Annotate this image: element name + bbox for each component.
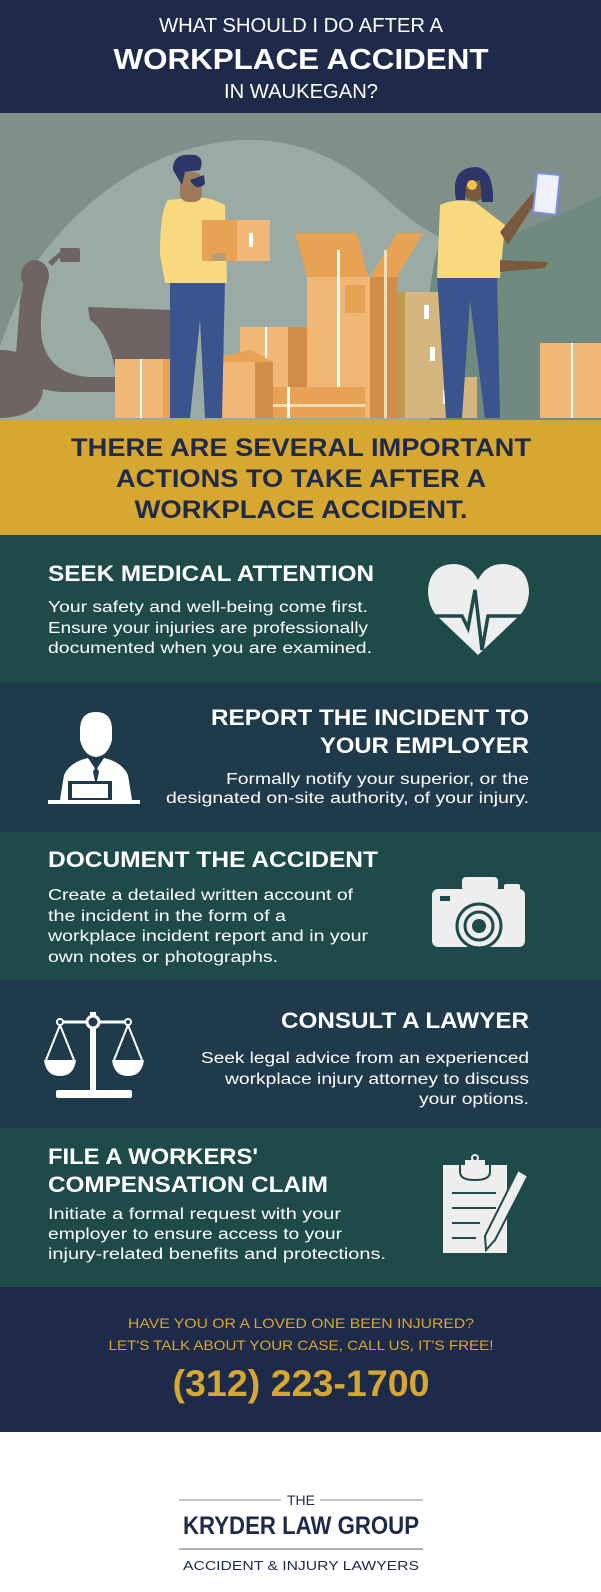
- panel: report the incident: designated on-site authority, of your injury.: [166, 790, 529, 807]
- woman: [437, 167, 560, 418]
- icon: scales of justice: [44, 1012, 144, 1098]
- header: WORKPLACE ACCIDENT: [114, 44, 489, 76]
- banner: intro statement: [0, 420, 601, 535]
- panel: file a workers' compensation claim: FILE A WORKERS': [48, 1144, 258, 1169]
- panel: document the accident: the incident in the form of a: [48, 908, 286, 925]
- panel: file a workers' compensation claim: injury-related benefits and protections.: [48, 1246, 386, 1263]
- banner: intro statement: ACTIONS TO TAKE AFTER A: [116, 465, 486, 493]
- panel: report the incident: YOUR EMPLOYER: [320, 733, 529, 758]
- icon: employee at desk: [48, 712, 140, 804]
- panel: consult a lawyer: CONSULT A LAWYER: [281, 1008, 529, 1033]
- logo: [179, 1492, 423, 1573]
- panel: document the accident: [0, 832, 601, 980]
- icon: heart with pulse: [428, 564, 529, 655]
- boxes: [115, 233, 601, 418]
- panel: consult a lawyer: your options.: [419, 1091, 529, 1108]
- scooter: [0, 248, 180, 418]
- header: [0, 0, 601, 113]
- banner: intro statement: WORKPLACE ACCIDENT.: [134, 496, 468, 524]
- man: [160, 155, 270, 418]
- panel: seek medical attention: SEEK MEDICAL ATTENTION: [48, 561, 374, 586]
- panel: file a workers' compensation claim: Initiate a formal request with your: [48, 1206, 341, 1223]
- panel: document the accident: workplace incident report and in your: [47, 928, 368, 945]
- illustration: warehouse workers: [0, 113, 601, 420]
- icon: clipboard and pen: [443, 1155, 528, 1253]
- panel: seek medical attention: [0, 535, 601, 683]
- call to action: [0, 1287, 601, 1432]
- panel: report the incident: [0, 683, 601, 832]
- logo: THE: [287, 1492, 315, 1508]
- panel: file a workers' compensation claim: employer to ensure access to your: [48, 1226, 342, 1243]
- logo: KRYDER LAW GROUP: [183, 1512, 419, 1540]
- panel: document the accident: DOCUMENT THE ACCIDENT: [48, 847, 379, 872]
- panel: consult a lawyer: [0, 980, 601, 1128]
- panel: seek medical attention: Ensure your injuries are professionally: [48, 620, 368, 637]
- logo: ACCIDENT & INJURY LAWYERS: [183, 1558, 419, 1573]
- call to action: HAVE YOU OR A LOVED ONE BEEN INJURED?: [128, 1315, 474, 1331]
- panel: report the incident: REPORT THE INCIDENT TO: [211, 705, 529, 730]
- panel: document the accident: own notes or photographs.: [48, 949, 278, 966]
- header: IN WAUKEGAN?: [224, 81, 378, 103]
- icon: camera: [432, 877, 525, 948]
- phone number: (312) 223-1700: [172, 1363, 430, 1404]
- panel: consult a lawyer: Seek legal advice from an experienced: [201, 1050, 529, 1067]
- panel: file a workers' compensation claim: COMPENSATION CLAIM: [48, 1172, 328, 1197]
- call to action: LET'S TALK ABOUT YOUR CASE, CALL US, IT'S FREE!: [108, 1337, 494, 1353]
- panel: report the incident: Formally notify your superior, or the: [226, 771, 529, 788]
- panel: seek medical attention: Your safety and well-being come first.: [48, 599, 368, 616]
- panel: consult a lawyer: workplace injury attorney to discuss: [224, 1071, 529, 1088]
- header: WHAT SHOULD I DO AFTER A: [159, 15, 444, 37]
- panel: document the accident: Create a detailed written account of: [48, 887, 354, 904]
- panel: file a workers' compensation claim: [0, 1128, 601, 1287]
- panel: seek medical attention: documented when you are examined.: [48, 640, 372, 657]
- banner: intro statement: THERE ARE SEVERAL IMPORTANT: [71, 434, 531, 462]
